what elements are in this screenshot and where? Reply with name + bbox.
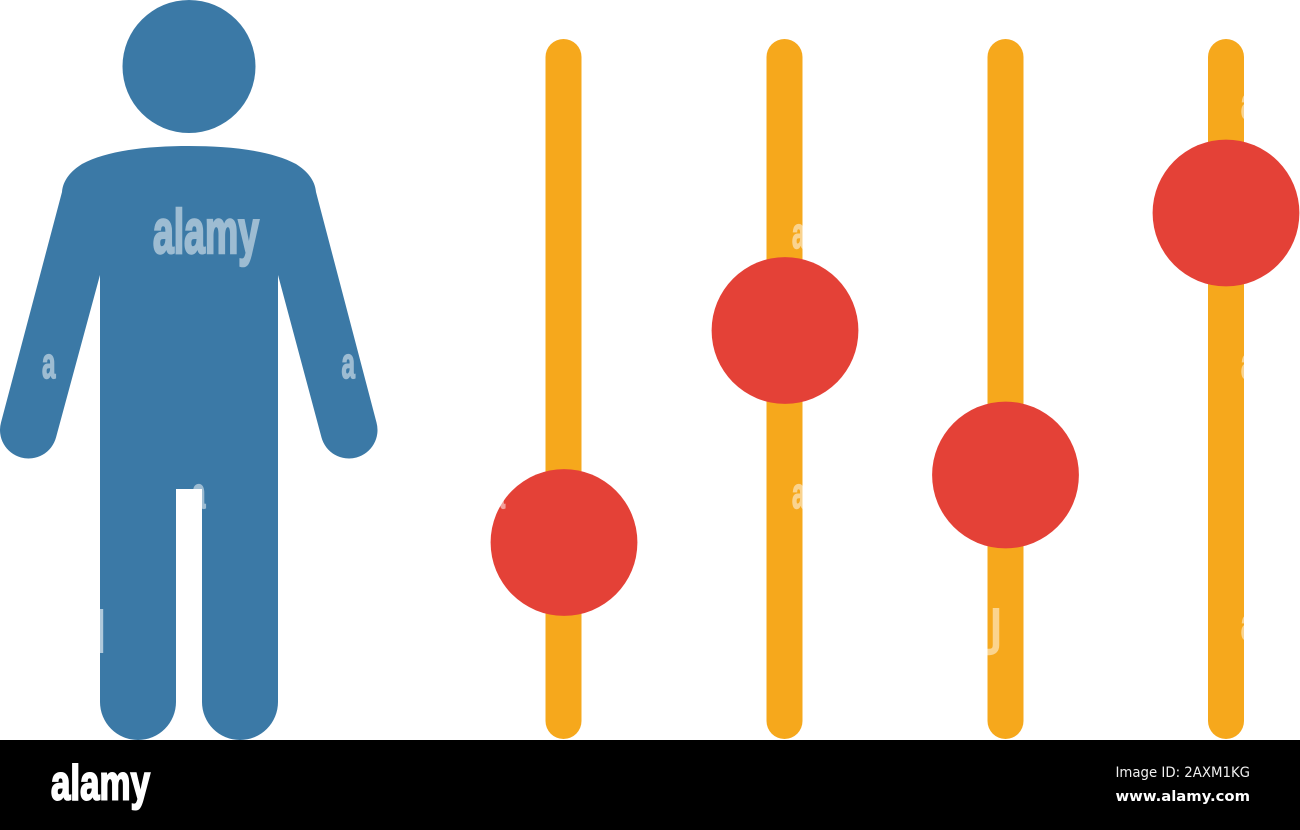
- watermark: chest: alamy: [153, 198, 259, 267]
- watermark: slider 4 middle fragment: a: [1241, 339, 1255, 388]
- watermark: slider 3 fragment: [987, 608, 996, 652]
- watermark: left arm: a: [42, 339, 56, 388]
- person body: [0, 146, 377, 740]
- watermark: slider 4 upper fragment: a: [1241, 79, 1255, 128]
- slider 3 track: [988, 39, 1024, 739]
- person head: [122, 0, 256, 133]
- watermark: right arm: a: [342, 339, 355, 388]
- slider 2 track: [766, 39, 802, 739]
- watermark: slider 1 fragment: a: [492, 469, 505, 518]
- footer bar: [0, 740, 1300, 830]
- watermark: slider 2 lower fragment: a: [792, 469, 806, 518]
- watermark: slider 2 upper fragment: a: [792, 209, 806, 258]
- footer image id: Image ID: 2AXM1KG: [1116, 765, 1250, 781]
- slider 4 knob: [1153, 140, 1299, 286]
- slider 4: [1153, 39, 1299, 739]
- slider 3: [932, 39, 1079, 739]
- footer url: www.alamy.com: [1116, 789, 1250, 805]
- icon: person: [0, 0, 377, 740]
- slider 3 knob: [932, 402, 1079, 548]
- watermark: left leg fragment: [100, 609, 103, 653]
- slider 1: [491, 39, 637, 739]
- slider 1 knob: [491, 469, 637, 616]
- slider 2: [712, 39, 858, 739]
- watermark: slider 4 lower fragment: a: [1241, 600, 1255, 649]
- slider 1 track: [546, 39, 582, 739]
- slider 2 knob: [712, 257, 858, 404]
- slider 4 track: [1208, 39, 1244, 739]
- watermark: crotch fragment: a: [192, 469, 206, 518]
- footer logo: alamy: [51, 756, 150, 810]
